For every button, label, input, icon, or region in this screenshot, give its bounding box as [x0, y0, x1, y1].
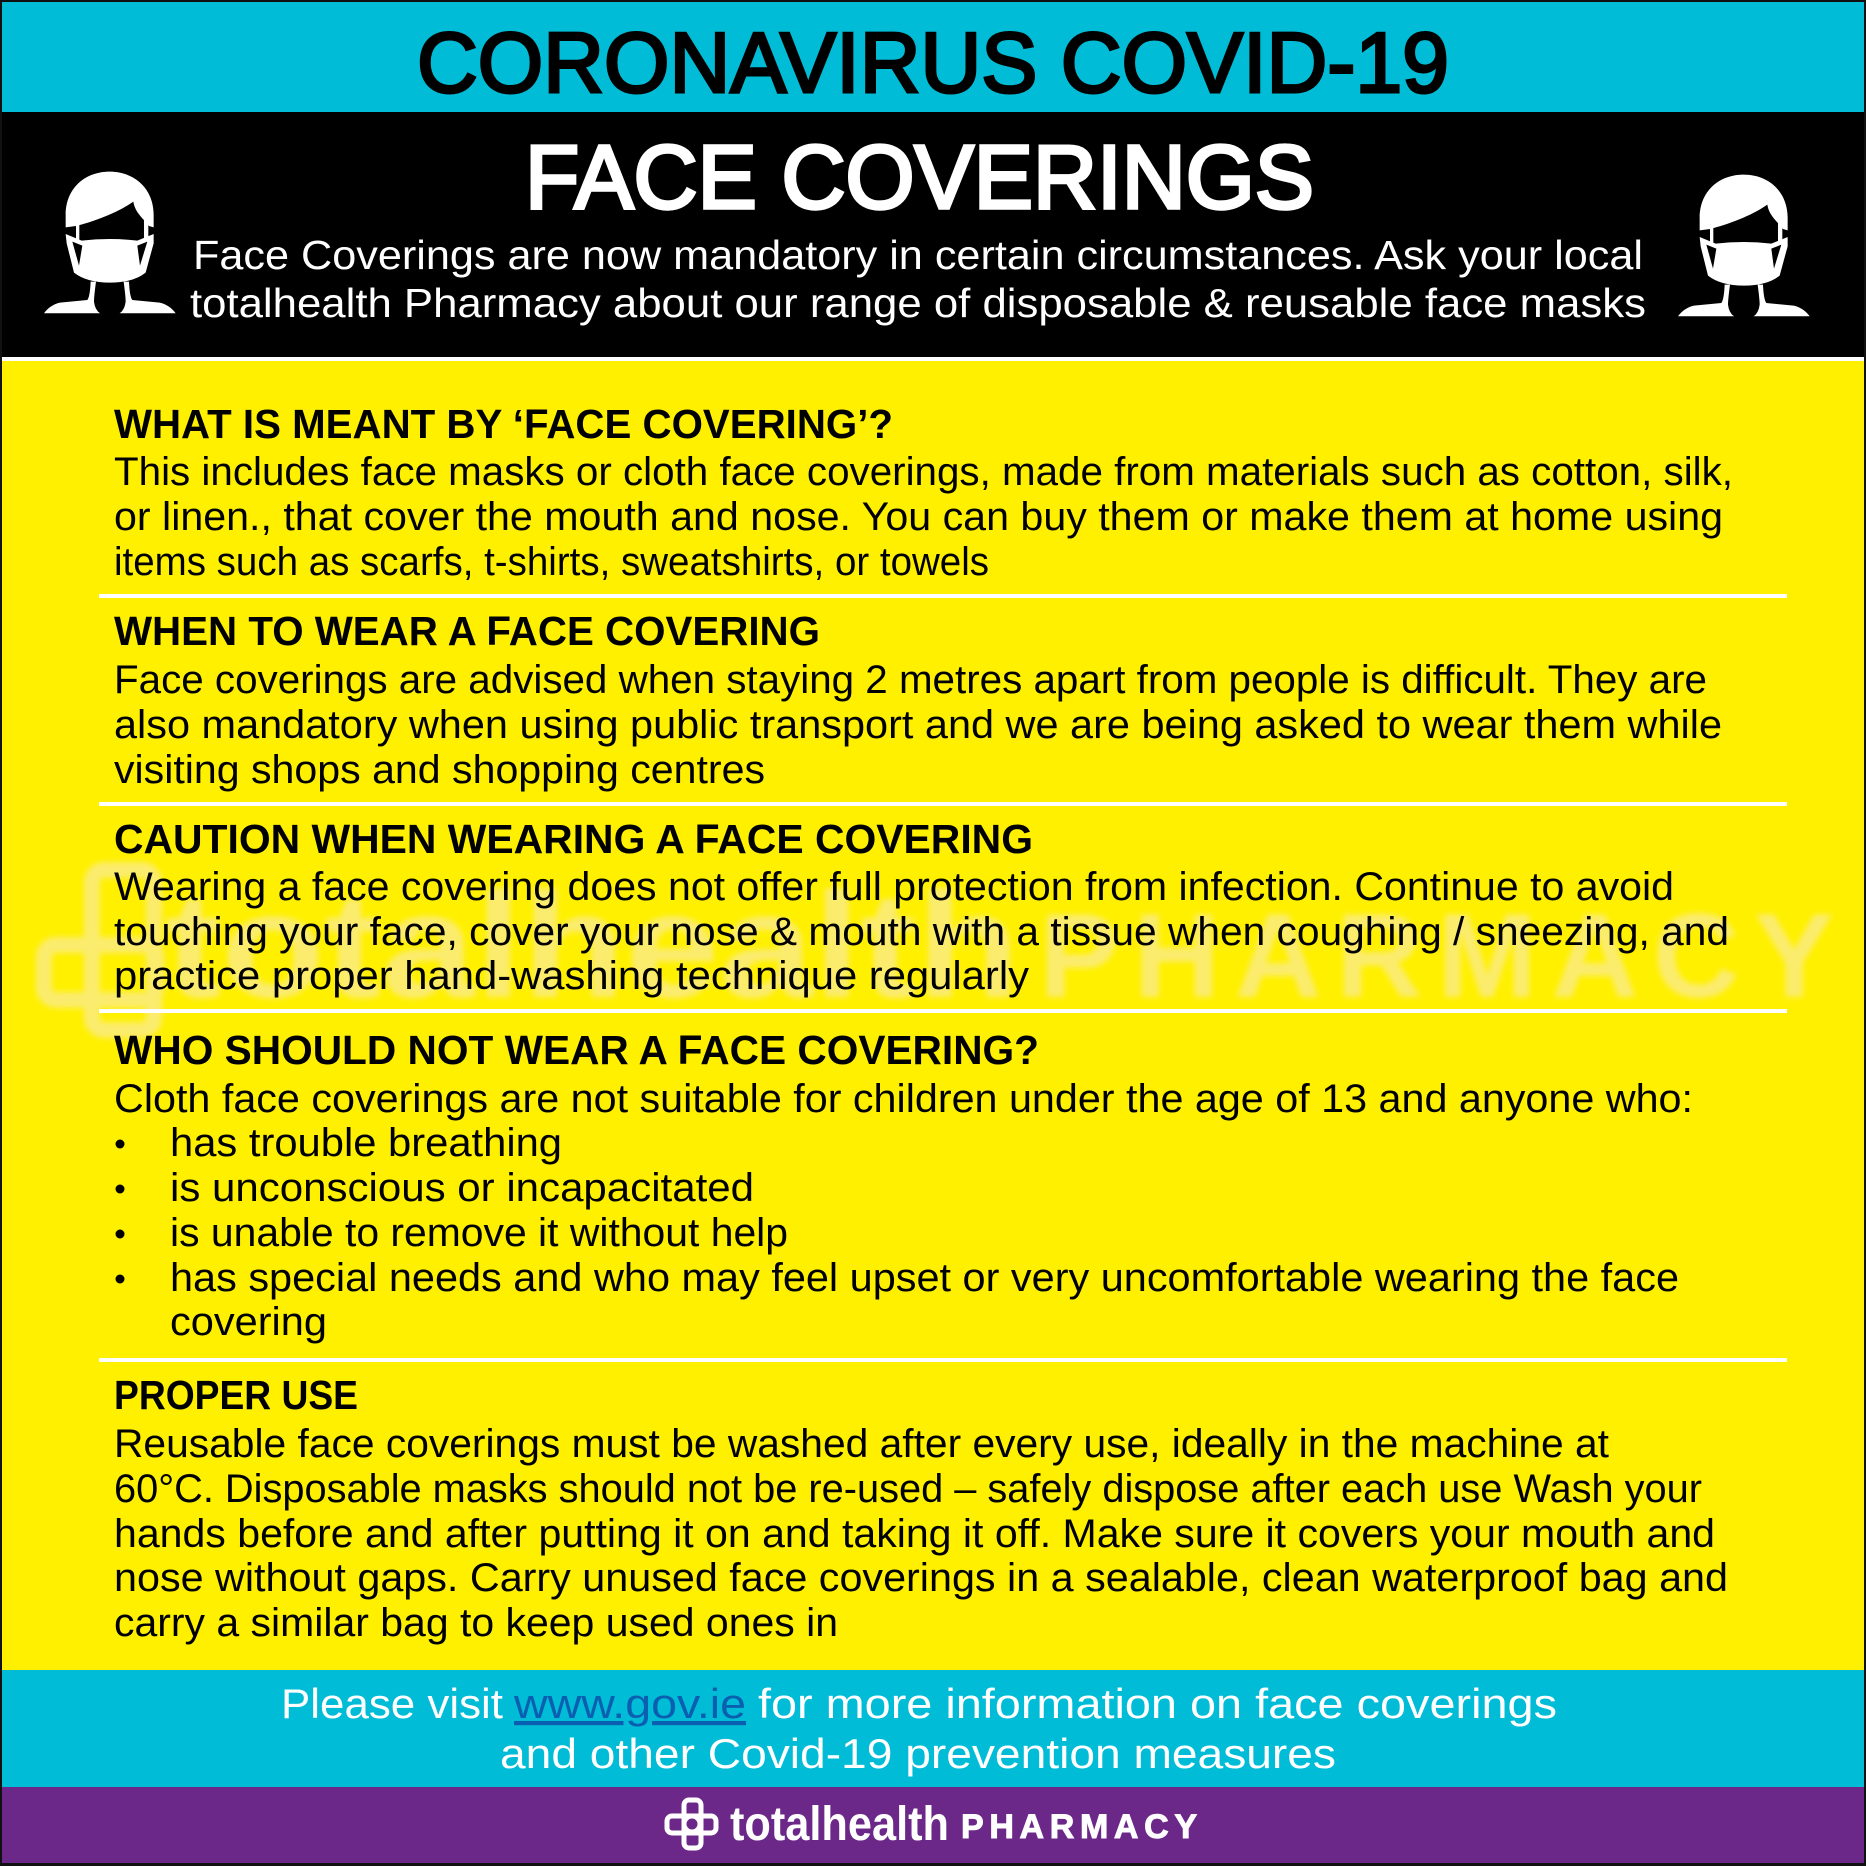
section: when to wear a face covering: also mandatory when using public transport and we are being asked to wear them while: [114, 703, 1722, 747]
intro text: totalhealth Pharmacy about our range of disposable & reusable face masks: [190, 280, 1646, 326]
section: caution when wearing a face covering: CAUTION WHEN WEARING A FACE COVERING: [114, 816, 1033, 862]
section: proper use: carry a similar bag to keep used ones in: [114, 1601, 838, 1645]
intro text: [190, 232, 1646, 326]
link: www.gov.ie: www.gov.ie: [513, 1680, 746, 1727]
title: CORONAVIRUS COVID-19: [417, 16, 1449, 111]
section: proper use: [114, 1372, 1728, 1645]
section: who should not wear a face covering: [114, 1027, 1693, 1344]
panel: more information band: [2, 1670, 1864, 1787]
bullet list: has special needs and who may feel upset or very uncomfortable wearing the face: [170, 1256, 1679, 1300]
icon: totalhealth cross logo: [667, 1800, 716, 1848]
section: proper use: nose without gaps. Carry unused face coverings in a sealable, clean waterproof bag and: [114, 1556, 1728, 1600]
section: proper use: Reusable face coverings must be washed after every use, ideally in the machine at: [114, 1422, 1609, 1466]
logo wordmark: totalhealth: totalhealth: [730, 1798, 949, 1851]
panel: more information band: and other Covid-19 prevention measures: [500, 1730, 1336, 1777]
section: when to wear a face covering: Face coverings are advised when staying 2 metres apart from people is difficult. They are: [114, 658, 1707, 702]
bullet list: is unconscious or incapacitated: [170, 1166, 754, 1210]
watermark: totalhealth pharmacy logo: PHARMACY: [1039, 889, 1834, 1023]
section: what is meant by face covering: items such as scarfs, t-shirts, sweatshirts, or towels: [114, 540, 989, 584]
section: when to wear a face covering: WHEN TO WEAR A FACE COVERING: [114, 608, 820, 654]
section: proper use: 60°C. Disposable masks should not be re-used – safely dispose after each use Wash your: [114, 1467, 1702, 1511]
section: when to wear a face covering: [114, 608, 1722, 792]
section: caution when wearing a face covering: touching your face, cover your nose & mouth with a tissue when coughing / sneezing, and: [114, 910, 1729, 954]
icon: person wearing mask, left: [44, 172, 176, 313]
section: what is meant by face covering: [114, 401, 1733, 584]
section: proper use: PROPER USE: [114, 1372, 358, 1418]
section: caution when wearing a face covering: Wearing a face covering does not offer full protection from infection. Continue to avoid: [114, 865, 1674, 909]
section: caution when wearing a face covering: practice proper hand-washing technique regularly: [114, 954, 1029, 998]
section: proper use: hands before and after putting it on and taking it off. Make sure it covers your mouth and: [114, 1512, 1715, 1556]
icon: person wearing mask, right: [1678, 175, 1810, 316]
section: who should not wear a face covering: Cloth face coverings are not suitable for children under the age of 13 and anyone who:: [114, 1077, 1693, 1121]
section: caution when wearing a face covering: [114, 816, 1729, 998]
watermark: totalhealth pharmacy logo: [44, 861, 1834, 1030]
panel: yellow information area: [2, 361, 1864, 1670]
bullet list: covering: [170, 1300, 327, 1344]
section: what is meant by face covering: This includes face masks or cloth face coverings, made from materials such as cotton, silk,: [114, 450, 1733, 494]
section: who should not wear a face covering: WHO SHOULD NOT WEAR A FACE COVERING?: [114, 1027, 1039, 1073]
bullet list: is unable to remove it without help: [170, 1211, 788, 1255]
intro text: Face Coverings are now mandatory in certain circumstances. Ask your local: [193, 232, 1643, 278]
logo wordmark: pharmacy: PHARMACY: [961, 1808, 1197, 1846]
bullet list: [116, 1121, 1679, 1344]
heading: face coverings: FACE COVERINGS: [525, 128, 1314, 228]
section: when to wear a face covering: visiting shops and shopping centres: [114, 748, 765, 792]
section: what is meant by face covering: or linen., that cover the mouth and nose. You can buy them or make them at home using: [114, 495, 1723, 539]
panel: footer logo band: [2, 1787, 1864, 1863]
bullet list: has trouble breathing: [170, 1121, 562, 1165]
panel: title band: [2, 2, 1864, 112]
watermark: totalhealth pharmacy logo: totalhealth: [165, 861, 1020, 1029]
section: what is meant by face covering: WHAT IS MEANT BY ‘FACE COVERING’?: [114, 401, 893, 447]
panel: face coverings header: [2, 112, 1864, 357]
panel: more information band: for more information on face coverings: [758, 1680, 1557, 1727]
panel: more information band: Please visit: [281, 1680, 503, 1727]
